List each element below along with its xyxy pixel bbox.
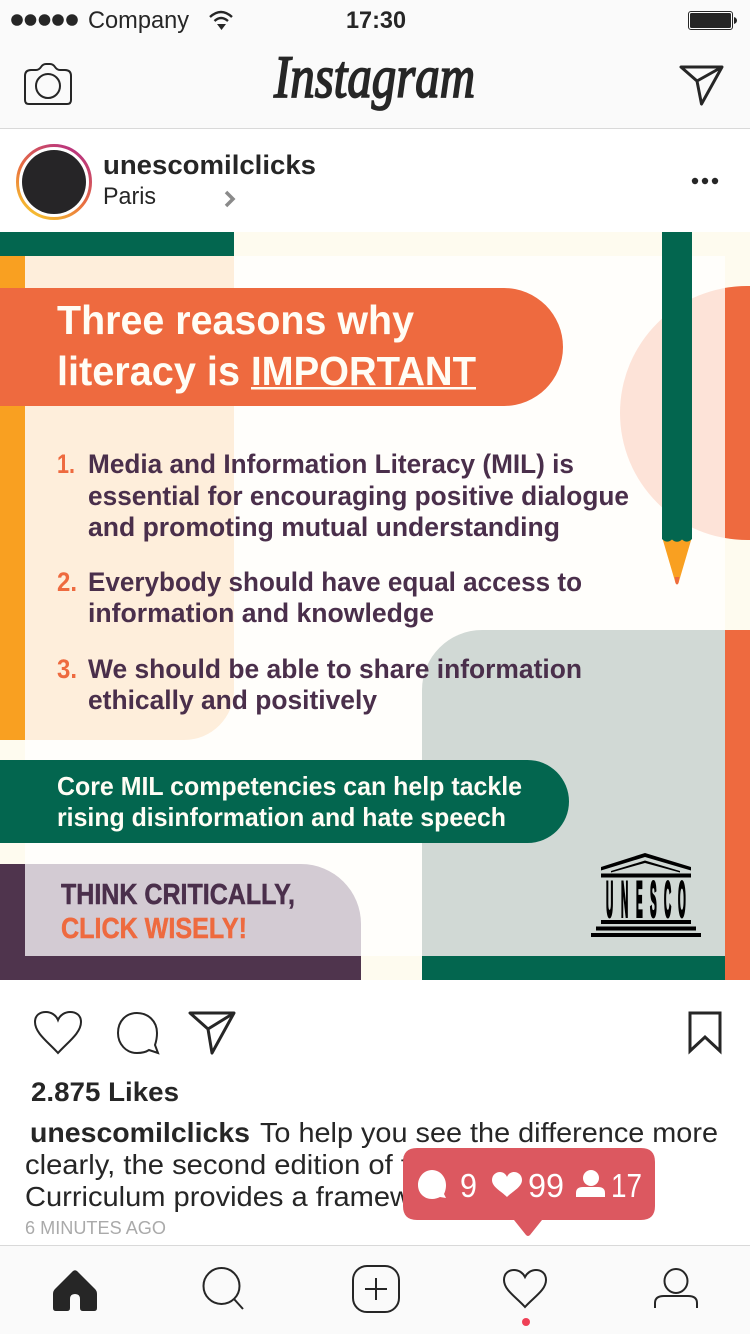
icon: bookmark bbox=[690, 1013, 720, 1051]
caption bbox=[25, 1117, 718, 1212]
status bar: 17:30 bbox=[346, 7, 406, 34]
list of reasons: Everybody should have equal access to bbox=[88, 567, 582, 597]
logo: Instagram: Instagram bbox=[273, 44, 475, 110]
icon: profile bbox=[655, 1269, 697, 1308]
bottom navigation bbox=[0, 1245, 750, 1334]
grey box bbox=[422, 630, 725, 956]
slogan block bbox=[0, 864, 361, 980]
icon: comment bbox=[418, 1170, 446, 1199]
list of reasons bbox=[57, 449, 629, 715]
top bar bbox=[0, 0, 750, 129]
title banner: Three reasons why bbox=[57, 297, 414, 343]
title banner: IMPORTANT bbox=[251, 348, 476, 394]
avatar bbox=[18, 146, 90, 218]
action icons bbox=[35, 1012, 720, 1053]
notification tooltip: 9 bbox=[460, 1167, 477, 1204]
list of reasons: essential for encouraging positive dialogue bbox=[88, 481, 629, 511]
icon: chevron bbox=[226, 192, 233, 206]
icon: add bbox=[353, 1266, 399, 1312]
green banner: Core MIL competencies can help tackle bbox=[57, 771, 522, 801]
caption: unescomilclicks bbox=[30, 1117, 250, 1148]
list of reasons: information and knowledge bbox=[88, 598, 434, 628]
icon: share bbox=[190, 1013, 234, 1053]
caption: clearly, the second edition of t bbox=[25, 1149, 409, 1180]
icon: camera bbox=[25, 64, 71, 104]
notification tooltip bbox=[403, 1148, 655, 1236]
list of reasons: 3. bbox=[57, 654, 77, 684]
notification tooltip: 99 bbox=[528, 1167, 564, 1204]
list of reasons: and promoting mutual understanding bbox=[88, 512, 560, 542]
icon: like bbox=[35, 1012, 81, 1053]
title banner: literacy is bbox=[57, 348, 240, 394]
post image panel bbox=[0, 232, 750, 980]
list of reasons: 2. bbox=[57, 567, 77, 597]
icon: search bbox=[204, 1268, 243, 1309]
timestamp: 6 MINUTES AGO bbox=[25, 1218, 166, 1238]
icon: comment bbox=[118, 1013, 158, 1053]
notification tooltip: 17 bbox=[611, 1167, 642, 1204]
slogan block: THINK CRITICALLY, bbox=[61, 879, 295, 911]
list of reasons: We should be able to share information bbox=[88, 654, 582, 684]
list of reasons: Media and Information Literacy (MIL) is bbox=[88, 449, 574, 479]
list of reasons: 1. bbox=[57, 449, 75, 479]
status bar bbox=[11, 7, 737, 34]
account name: unescomilclicks bbox=[103, 150, 316, 180]
green banner: rising disinformation and hate speech bbox=[57, 802, 506, 832]
logo: UNESCO bbox=[591, 853, 701, 937]
notification dot bbox=[522, 1318, 530, 1326]
status bar: Company bbox=[88, 7, 189, 34]
logo: UNESCO: UNESCO bbox=[606, 871, 686, 928]
caption: Curriculum provides a framew bbox=[25, 1181, 412, 1212]
title banner bbox=[0, 288, 563, 406]
slogan block: CLICK WISELY! bbox=[61, 913, 247, 945]
green banner bbox=[0, 760, 569, 843]
caption: To help you see the difference more bbox=[260, 1117, 718, 1148]
icon: heart bbox=[492, 1172, 522, 1197]
post header bbox=[18, 146, 718, 218]
likes count: 2.875 Likes bbox=[31, 1077, 179, 1107]
decorative circle bbox=[620, 286, 750, 540]
icon: pencil bbox=[662, 232, 692, 584]
icon: more bbox=[692, 178, 718, 184]
icon: person bbox=[576, 1170, 605, 1197]
icon: send bbox=[681, 67, 722, 104]
list of reasons: ethically and positively bbox=[88, 685, 377, 715]
icon: activity bbox=[504, 1270, 546, 1307]
location: Paris bbox=[103, 183, 156, 210]
icon: home bbox=[53, 1270, 97, 1311]
